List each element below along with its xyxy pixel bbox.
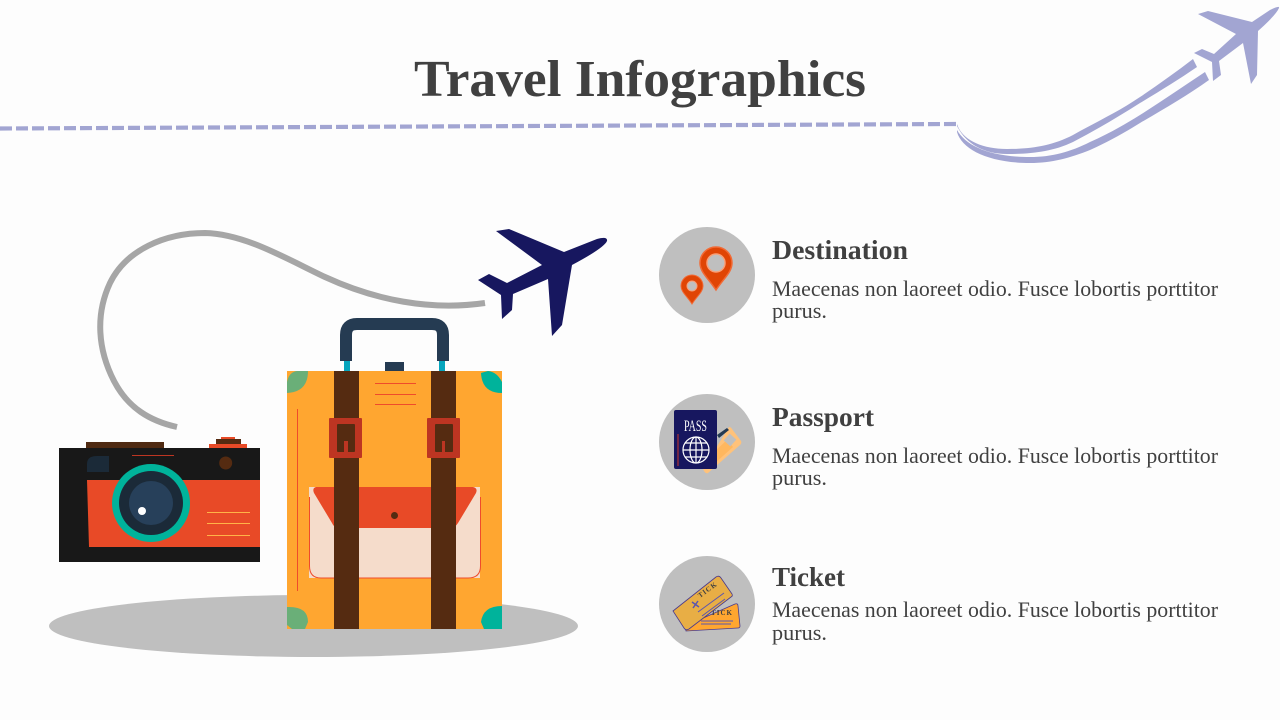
text: destination: purus. [772, 298, 827, 323]
camera [59, 437, 260, 562]
ticket item [659, 556, 1219, 652]
heading: passport: Passport [772, 402, 874, 432]
suitcase [287, 324, 502, 629]
dashed flight path [0, 124, 956, 128]
ground shadow [49, 595, 578, 657]
heading: destination: Destination [772, 235, 908, 265]
text: ticket: Maecenas non laoreet odio. Fusce lobortis porttitor [772, 597, 1219, 622]
icon: passport [659, 394, 755, 490]
icon: tickets [659, 556, 755, 652]
icon: top right plane with trails [957, 7, 1279, 163]
destination item [659, 227, 1219, 323]
dotted route line [100, 233, 485, 427]
buckles [329, 418, 460, 458]
passport item [659, 394, 1219, 490]
icon: passport: PASS [684, 418, 707, 435]
icon: tickets: TICK [696, 580, 719, 600]
text: passport: purus. [772, 465, 827, 490]
pocket [309, 487, 480, 578]
heading: ticket: Ticket [772, 562, 845, 592]
text: ticket: purus. [772, 620, 827, 645]
text: passport: Maecenas non laoreet odio. Fusce lobortis porttitor [772, 443, 1219, 468]
suitcase handle [346, 324, 443, 361]
icon: tickets: TICK [711, 609, 733, 617]
icon: navy plane [478, 229, 607, 336]
text: destination: Maecenas non laoreet odio. Fusce lobortis porttitor [772, 276, 1219, 301]
title: Travel Infographics [414, 51, 866, 108]
icon: location pins [659, 227, 755, 323]
